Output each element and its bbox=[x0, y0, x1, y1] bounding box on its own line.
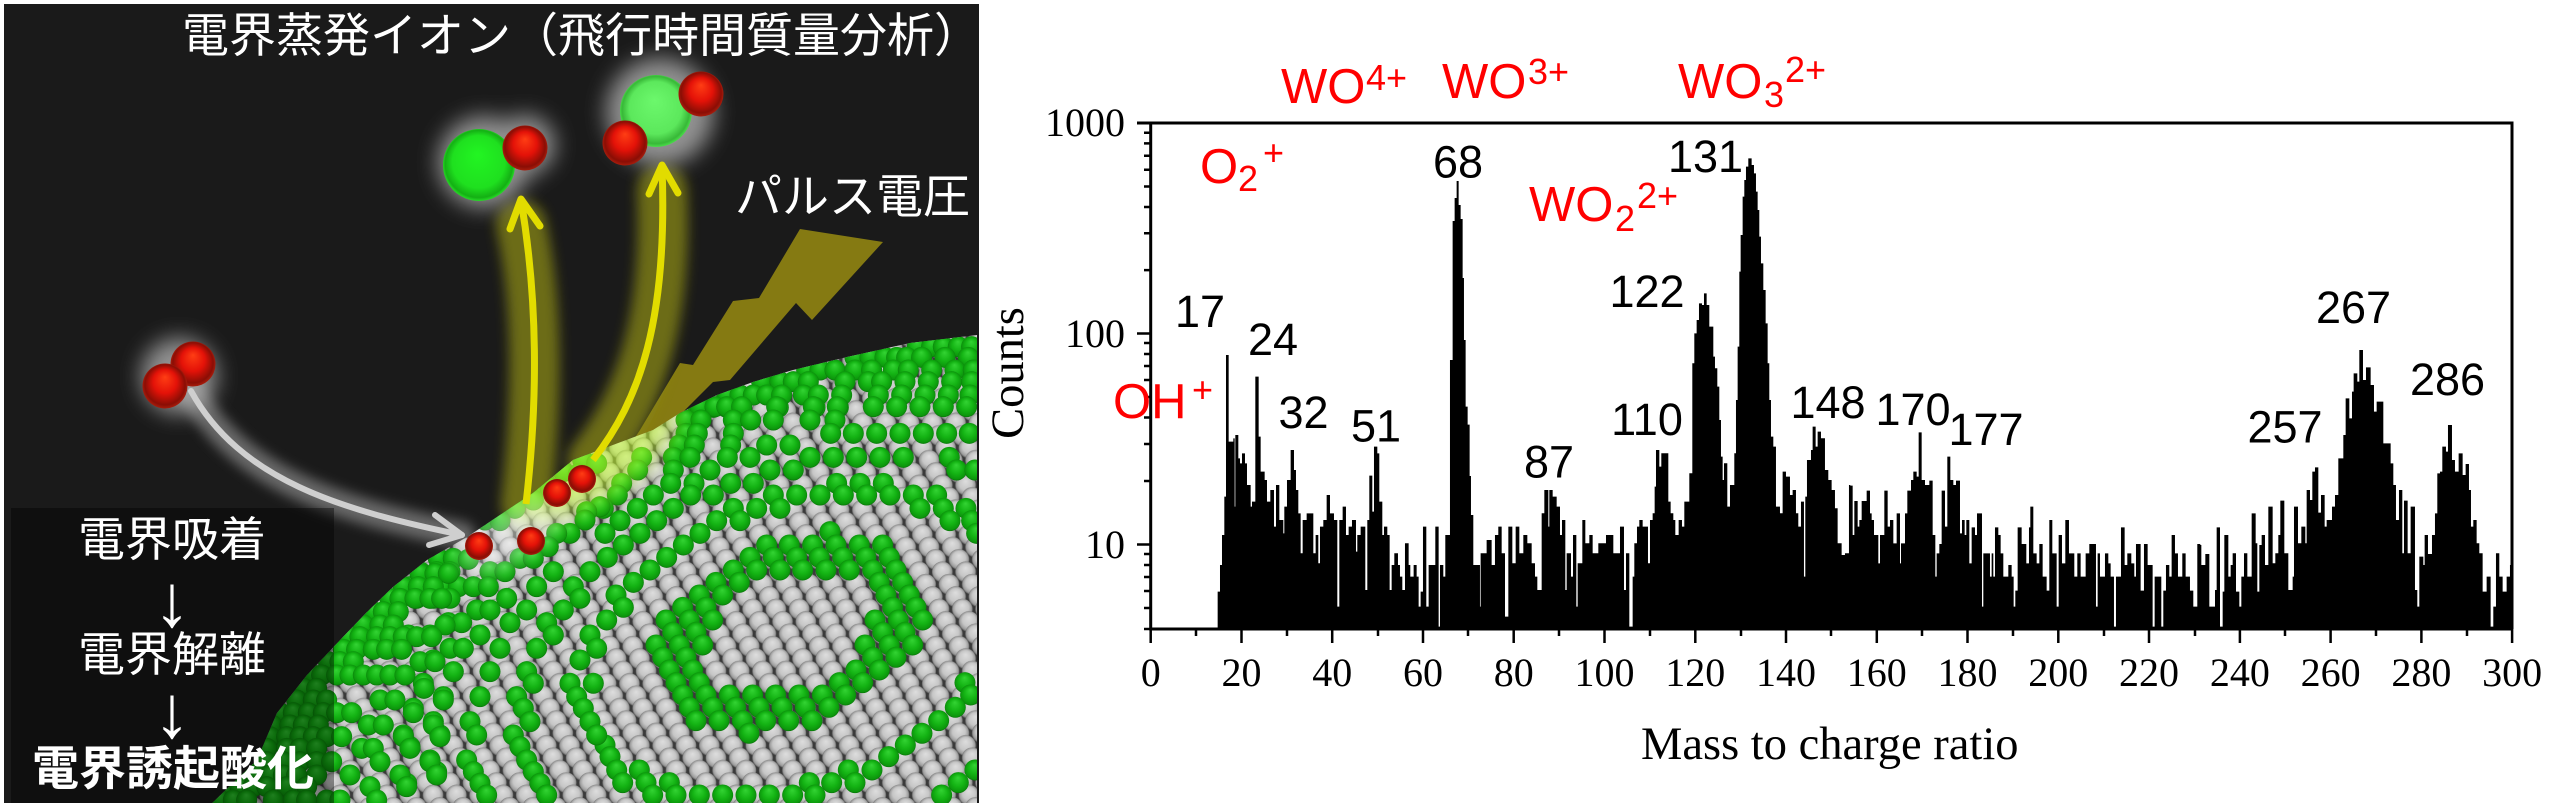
x-axis tick labels: 0 bbox=[1141, 650, 1161, 695]
arrow: adsorption path bbox=[191, 391, 462, 545]
x-axis tick labels: 140 bbox=[1756, 650, 1816, 695]
green atoms: upper edge rows bbox=[698, 347, 973, 407]
ion species labels: 2 bbox=[1238, 158, 1258, 199]
x-axis tick labels: 180 bbox=[1938, 650, 1998, 695]
arrow: ion left bbox=[510, 199, 540, 504]
green atoms: terrace rings bbox=[603, 407, 977, 795]
title: 電界蒸発イオン（飛行時間質量分析） bbox=[182, 9, 981, 62]
x-axis tick labels: 280 bbox=[2391, 650, 2451, 695]
x-axis tick labels: 200 bbox=[2028, 650, 2088, 695]
peak labels: 110 bbox=[1611, 394, 1683, 445]
icon: pulse voltage lightning bolt bbox=[636, 229, 883, 436]
peak labels: 122 bbox=[1609, 266, 1685, 317]
ion species labels: 4+ bbox=[1366, 57, 1407, 98]
ion species labels: O bbox=[1200, 140, 1238, 194]
ion species labels: 3+ bbox=[1528, 51, 1569, 92]
peak labels: 24 bbox=[1248, 314, 1298, 365]
x-axis tick labels: 120 bbox=[1665, 650, 1725, 695]
step 1: 電界吸着 bbox=[78, 513, 266, 566]
ion species labels: WO bbox=[1442, 55, 1526, 109]
yellow glow behind ion arrows bbox=[521, 190, 663, 504]
green atoms: centre-left stripes bbox=[403, 460, 600, 795]
step 2: 電界解離 bbox=[78, 628, 266, 681]
ion species labels bbox=[1113, 49, 1826, 429]
peak labels: 17 bbox=[1175, 286, 1225, 337]
y-axis title: Counts bbox=[983, 307, 1034, 439]
spectrum bars bbox=[1218, 158, 2513, 630]
step 3: 電界誘起酸化 bbox=[32, 742, 314, 795]
ion species labels: WO bbox=[1678, 55, 1762, 109]
ion species labels: + bbox=[1192, 369, 1213, 410]
x-axis tick labels: 20 bbox=[1222, 650, 1262, 695]
x-axis tick labels: 100 bbox=[1574, 650, 1634, 695]
ion species labels: 2+ bbox=[1785, 49, 1826, 90]
ion species labels: OH bbox=[1113, 375, 1186, 429]
y-axis tick labels: 10 bbox=[1085, 522, 1125, 567]
peak labels: 131 bbox=[1668, 131, 1743, 182]
white glow behind adsorption arrow bbox=[191, 391, 462, 535]
peak labels: 267 bbox=[2316, 282, 2391, 333]
peak labels: 87 bbox=[1524, 436, 1574, 488]
peak labels: 170 bbox=[1875, 384, 1951, 435]
x-axis tick labels: 160 bbox=[1847, 650, 1907, 695]
ion species labels: + bbox=[1263, 132, 1284, 173]
x-axis ticks bbox=[1151, 629, 2512, 643]
ion species labels: 3 bbox=[1764, 74, 1784, 115]
ion halos bbox=[141, 58, 714, 414]
label: pulse voltage: パルス電圧 bbox=[735, 170, 970, 223]
plot frame bbox=[1137, 123, 2512, 629]
chart: mass spectrum bbox=[983, 49, 2542, 770]
ion species labels: WO bbox=[1529, 178, 1613, 232]
x-axis tick labels: 40 bbox=[1312, 650, 1352, 695]
emitter tip atoms bbox=[190, 330, 980, 805]
atoms: adsorbed oxygen bbox=[465, 465, 596, 560]
peak labels: 68 bbox=[1433, 136, 1483, 188]
process steps bbox=[32, 513, 314, 795]
y-axis ticks bbox=[1137, 133, 1151, 629]
y-axis tick labels bbox=[1045, 100, 1125, 567]
ion species labels: 2+ bbox=[1637, 175, 1678, 216]
x-axis tick labels: 240 bbox=[2210, 650, 2270, 695]
peak labels: 148 bbox=[1790, 377, 1866, 428]
x-axis tick labels: 60 bbox=[1403, 650, 1443, 695]
bright spot around adsorbed oxygen bbox=[451, 486, 569, 584]
x-axis tick labels: 220 bbox=[2119, 650, 2179, 695]
peak labels: 257 bbox=[2247, 402, 2323, 452]
gray atom lattice bbox=[190, 330, 980, 805]
peak labels: 51 bbox=[1351, 400, 1401, 452]
peak labels: 32 bbox=[1278, 387, 1329, 438]
x-axis tick labels: 80 bbox=[1494, 650, 1534, 695]
arrow: ion right bbox=[593, 165, 678, 460]
peak labels: 286 bbox=[2410, 354, 2485, 405]
x-axis tick labels: 260 bbox=[2301, 650, 2361, 695]
green atoms: far-left edge bbox=[220, 573, 448, 800]
peak labels: 177 bbox=[1948, 404, 2024, 455]
ion species labels: 2 bbox=[1615, 198, 1635, 239]
x-axis tick labels bbox=[1141, 650, 2542, 695]
panel: field evaporation illustration bbox=[4, 4, 981, 805]
ion species labels: WO bbox=[1281, 60, 1365, 114]
x-axis title: Mass to charge ratio bbox=[1641, 719, 2018, 770]
peak labels bbox=[1175, 131, 2485, 488]
lime light from pulse on surface bbox=[497, 410, 689, 534]
arrow down 2: ↓ bbox=[154, 670, 190, 753]
molecule: evaporated ion left bbox=[443, 126, 548, 201]
y-axis tick labels: 1000 bbox=[1045, 100, 1125, 145]
y-axis tick labels: 100 bbox=[1065, 311, 1125, 356]
molecule: evaporated ion right bbox=[602, 72, 724, 166]
x-axis tick labels: 300 bbox=[2482, 650, 2542, 695]
arrow down 1: ↓ bbox=[154, 559, 190, 642]
dark label box bbox=[11, 508, 334, 803]
molecule: incoming oxygen bbox=[142, 342, 216, 408]
